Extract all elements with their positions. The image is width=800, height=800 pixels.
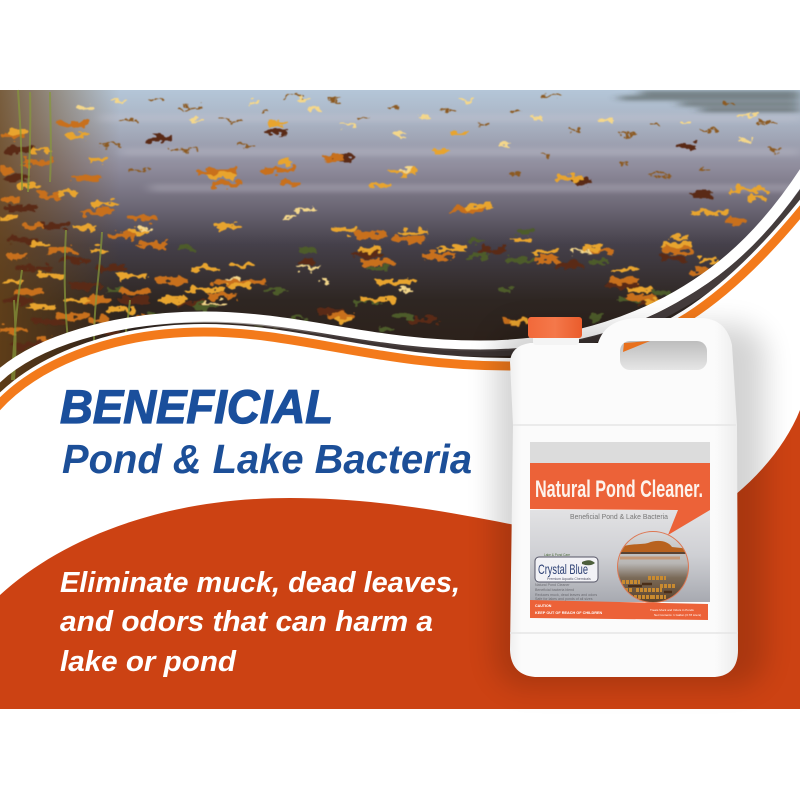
label water background [530,510,710,602]
jug handle opening [620,341,707,370]
label bottom warning strip: CAUTION [535,604,552,608]
label top strip [530,442,710,464]
jug moulded shoulder [510,425,738,633]
leaves: green layer [108,232,669,345]
body text on orange panel: Eliminate muck, dead leaves, [60,567,460,599]
infographic canvas [0,90,800,709]
leaves: golden yellow layer [0,124,766,322]
wave: orange stripe [0,200,800,415]
body text on orange panel: lake or pond [60,646,237,678]
Crystal Blue logo: Lake & Pond Care [544,553,570,557]
heading: BENEFICIAL: BENEFICIAL [60,380,333,433]
jug neck [533,335,579,345]
leaves: deep orange layer [0,124,742,340]
leaves: small distant specks [100,95,782,175]
Crystal Blue logo [535,553,598,582]
label small print: Safe for lakes and ponds of all sizes [535,597,593,601]
label bottom warning strip: KEEP OUT OF REACH OF CHILDREN [535,611,602,615]
orange panel [0,410,800,709]
wave: white stripe [0,170,800,385]
photo: pond with floating autumn leaves [0,90,800,430]
body text on orange panel [60,567,460,678]
jug body [510,318,738,677]
label title banner [530,463,710,535]
label small print: Beneficial bacteria blend [535,588,574,592]
product: gallon jug [510,317,738,677]
label bottom warning strip [530,600,708,620]
reeds at the left shoreline [12,90,130,380]
leaves: pale highlight layer [80,98,758,303]
label bottom warning strip: Treats Muck and Odors in Ponds [650,608,694,612]
label title: Natural Pond Cleaner. [535,476,703,503]
product label [530,442,710,620]
Crystal Blue logo: Crystal Blue [538,561,588,577]
body text on orange panel: and odors that can harm a [60,606,433,638]
label small print [535,583,597,601]
wave: dark stripe [0,188,800,402]
label small print: Natural Pond Cleaner [535,583,570,587]
subheading: Pond & Lake Bacteria [62,436,472,482]
white content panel [0,200,800,800]
label bottom warning strip: Net Contents: 1 Gallon (3.78 Liters) [654,613,701,617]
label small print: Reduces muck, dead leaves and odors [535,593,597,597]
label round pond photo [615,531,691,605]
jug cap [528,317,582,338]
bottle shadow [495,325,765,687]
leaves: dark brown layer [4,132,710,345]
Crystal Blue logo: Premium Aquatic Chemicals [547,577,591,581]
label subtitle: Beneficial Pond & Lake Bacteria [570,512,669,521]
wave: dark stripe right side [640,188,800,326]
